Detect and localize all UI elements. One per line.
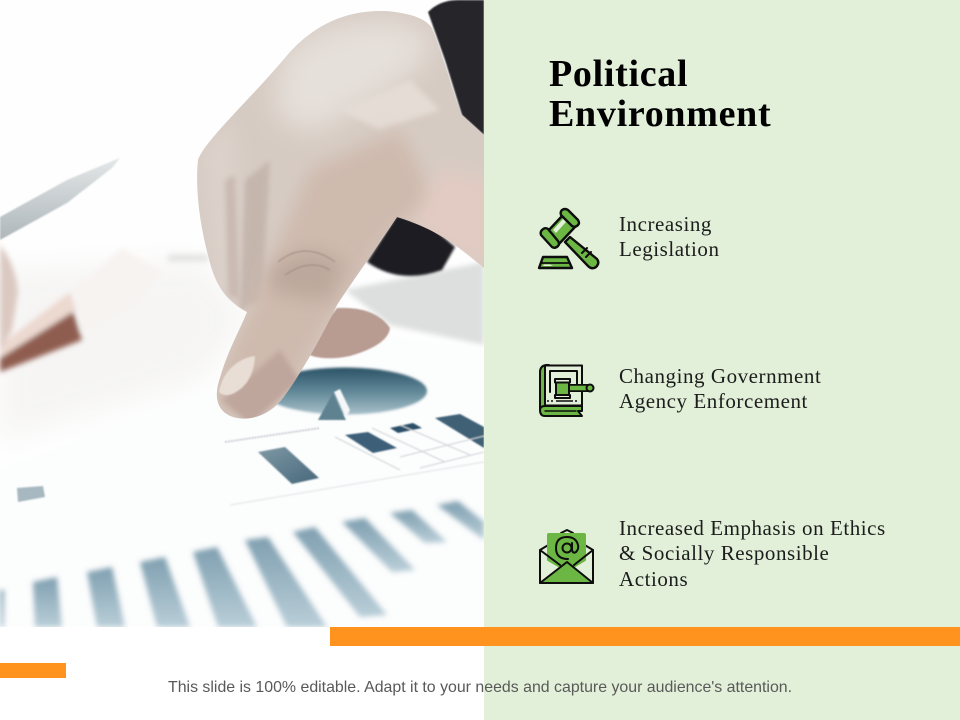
table tone [0,260,250,440]
orange bar: main [330,627,960,646]
photo: hand pointing at printed charts [0,0,484,627]
title: Environment [549,93,771,135]
panel: green background [484,0,960,720]
icon: open envelope with at sign [539,529,594,584]
hand [190,0,490,430]
title: Political [549,53,688,95]
text: changing government agency enforcement: Agency Enforcement [619,389,808,413]
blurred foreground bars [0,501,484,627]
text: increased emphasis on ethics: & Socially Responsible [619,541,829,565]
pie chart [263,368,427,414]
text: changing government agency enforcement [619,364,821,413]
text: increasing legislation: Legislation [619,237,720,261]
icon: law book with gavel [539,364,594,417]
text: changing government agency enforcement: Changing Government [619,364,821,388]
book [0,245,208,372]
title [549,53,771,135]
orange bar: small accent [0,663,66,678]
text: increasing legislation: Increasing [619,212,712,236]
text: increased emphasis on ethics: Increased Emphasis on Ethics [619,516,886,540]
footer text: This slide is 100% editable. Adapt it to your needs and capture your audience's attention. [168,679,792,696]
icon: gavel [538,208,600,270]
text: increasing legislation [619,212,720,261]
paper [0,336,484,627]
sleeve [428,0,484,135]
small charts [17,414,484,505]
text: increased emphasis on ethics: Actions [619,567,688,591]
text: increased emphasis on ethics [619,516,886,591]
pen [0,158,120,240]
